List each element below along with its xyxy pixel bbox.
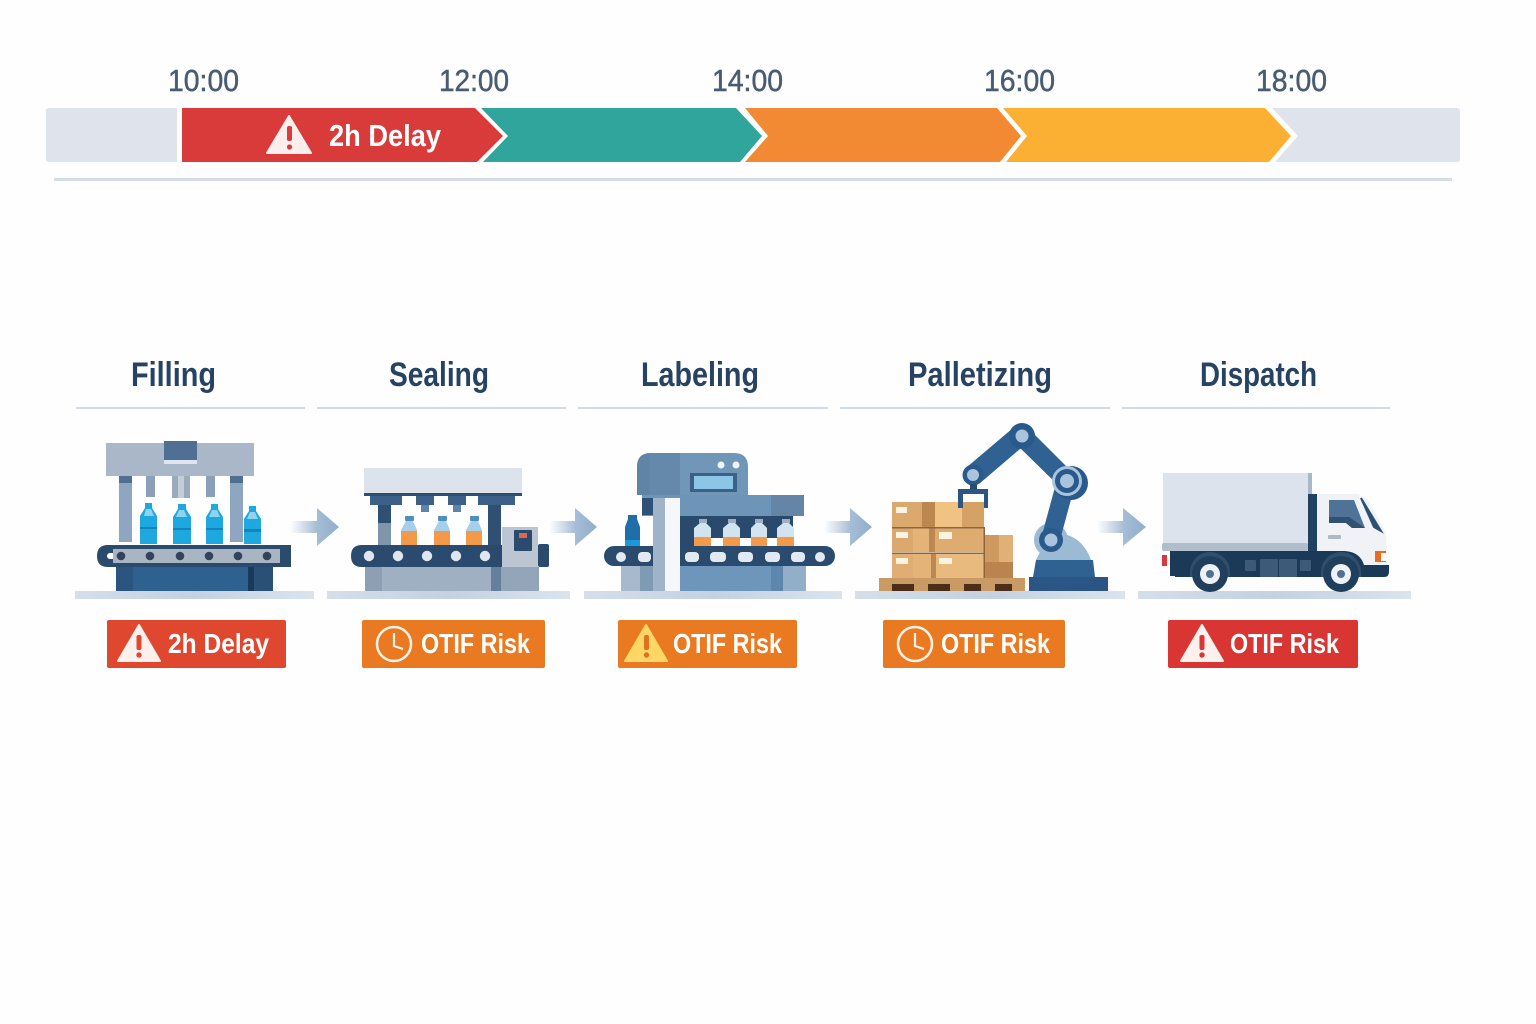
idle bar before start — [46, 108, 177, 162]
icon: filling machine — [97, 441, 291, 591]
time labels: 14:00 — [712, 63, 783, 98]
yellow segment — [1003, 108, 1291, 162]
time labels: 16:00 — [984, 63, 1055, 98]
badge: OTIF risk critical: OTIF Risk — [1230, 628, 1339, 659]
robot arm — [958, 423, 1108, 591]
boxes — [892, 502, 1013, 578]
time labels — [168, 63, 1327, 98]
badge: OTIF risk clock — [883, 620, 1065, 668]
icon: sealing machine — [351, 468, 549, 591]
idle bar after end — [1272, 108, 1460, 162]
badge: OTIF risk critical — [1168, 620, 1358, 668]
heading: Labeling: Labeling — [641, 356, 759, 394]
heading: Filling: Filling — [131, 356, 216, 394]
bottles — [694, 519, 794, 549]
arrow: labeling to palletizing — [824, 508, 872, 546]
teal segment — [481, 108, 762, 162]
badge: OTIF risk warning: OTIF Risk — [673, 628, 782, 659]
bottles — [140, 503, 261, 544]
arrow: palletizing to dispatch — [1097, 508, 1146, 546]
red delay segment — [182, 108, 503, 162]
delay label: 2h Delay — [329, 118, 442, 153]
badge: OTIF risk clock — [362, 620, 545, 668]
time labels: 10:00 — [168, 63, 239, 98]
heading: Palletizing: Palletizing — [908, 356, 1052, 394]
icon: delivery truck — [1162, 473, 1389, 592]
badge: OTIF risk clock: OTIF Risk — [421, 628, 530, 659]
badge: 2h delay — [107, 620, 286, 668]
heading: Dispatch: Dispatch — [1200, 356, 1317, 394]
icon: warning triangle — [267, 116, 311, 153]
time labels: 18:00 — [1256, 63, 1327, 98]
pallet — [879, 578, 1025, 591]
icon: palletizing robot — [879, 423, 1108, 591]
bottles — [401, 516, 482, 545]
orange segment — [745, 108, 1021, 162]
stage headings — [131, 356, 1317, 394]
badge: OTIF risk clock: OTIF Risk — [941, 628, 1050, 659]
time labels: 12:00 — [439, 63, 509, 98]
heading: Sealing: Sealing — [389, 356, 489, 394]
badge: OTIF risk warning — [618, 620, 797, 668]
arrow: filling to sealing — [290, 508, 339, 546]
icon: labeling machine — [604, 453, 835, 591]
arrow: sealing to labeling — [549, 508, 597, 546]
badge: 2h delay: 2h Delay — [168, 628, 269, 659]
timeline — [46, 63, 1460, 162]
